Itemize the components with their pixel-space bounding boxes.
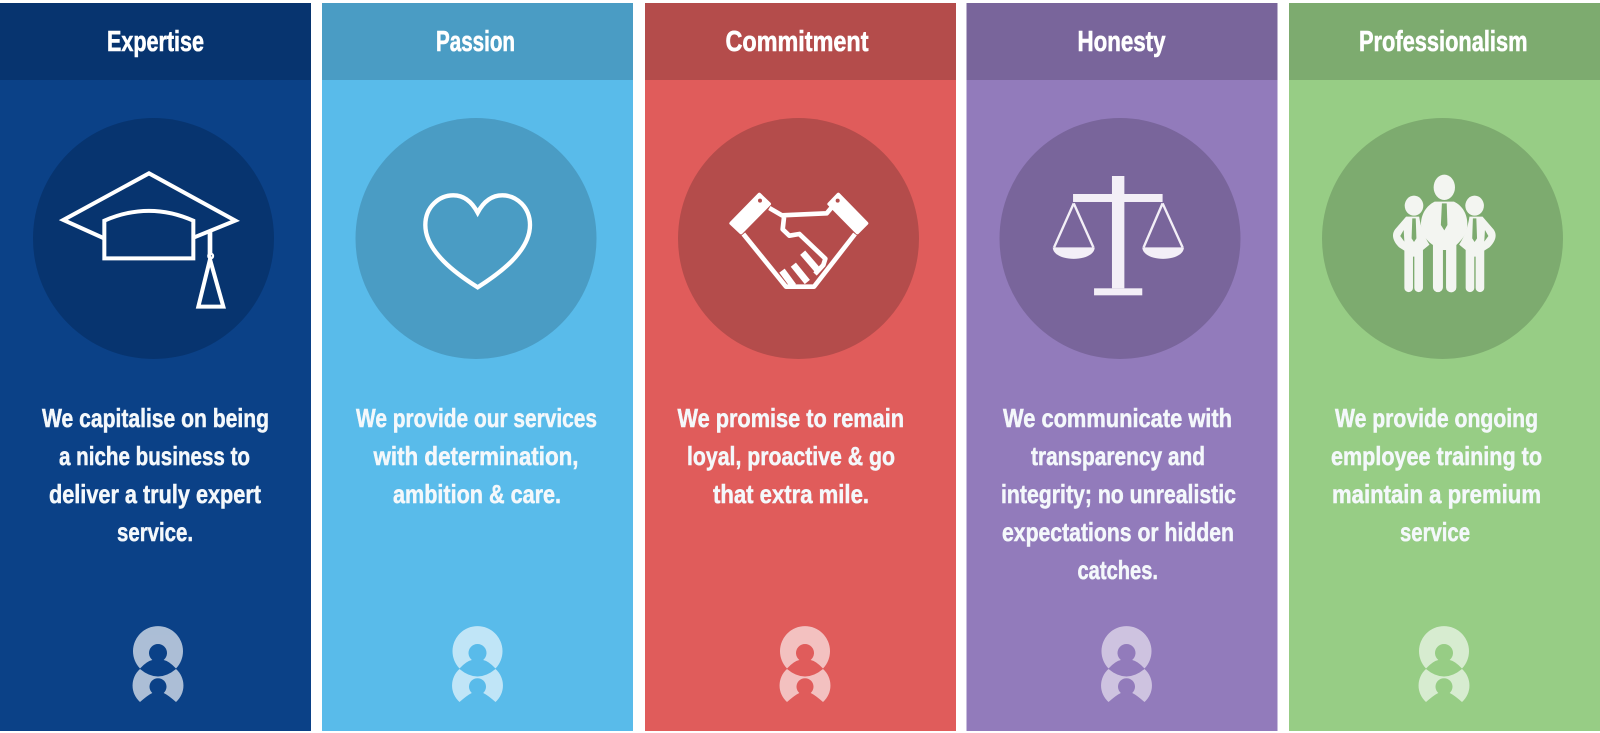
description text: catches. bbox=[1078, 555, 1158, 585]
icon: business people bbox=[1322, 118, 1563, 359]
logo bbox=[133, 626, 183, 702]
description text: service bbox=[1400, 517, 1470, 547]
logo bbox=[1101, 626, 1152, 702]
description text: service. bbox=[117, 517, 193, 547]
heading: Honesty bbox=[966, 3, 1278, 80]
heading: Expertise bbox=[0, 3, 311, 80]
heading: Passion bbox=[322, 3, 633, 80]
description text: deliver a truly expert bbox=[49, 479, 261, 509]
description text: expectations or hidden bbox=[1002, 517, 1234, 547]
panel: Passion bbox=[322, 3, 633, 731]
description text: We provide our services bbox=[356, 403, 597, 433]
heading: Professionalism bbox=[1289, 3, 1600, 80]
heading: Expertise: Expertise bbox=[107, 26, 204, 58]
heading: Passion: Passion bbox=[436, 26, 515, 58]
description text: maintain a premium bbox=[1332, 479, 1541, 509]
description text: a niche business to bbox=[59, 441, 250, 471]
logo bbox=[780, 626, 830, 702]
heading: Commitment bbox=[645, 3, 956, 80]
heading: Professionalism: Professionalism bbox=[1359, 26, 1528, 58]
icon: handshake bbox=[678, 118, 919, 359]
panel: Expertise bbox=[0, 3, 311, 731]
description text: We capitalise on being bbox=[42, 403, 269, 433]
icon: graduation cap bbox=[33, 118, 274, 359]
description text: employee training to bbox=[1331, 441, 1542, 471]
logo bbox=[1419, 626, 1469, 702]
description text: loyal, proactive & go bbox=[687, 441, 895, 471]
description text bbox=[678, 403, 904, 509]
logo bbox=[452, 626, 503, 702]
panel: Commitment bbox=[645, 3, 956, 731]
description text: ambition & care. bbox=[393, 479, 561, 509]
description text: transparency and bbox=[1031, 441, 1205, 471]
panel: Professionalism bbox=[1289, 3, 1600, 731]
description text bbox=[1331, 403, 1542, 547]
heading: Honesty: Honesty bbox=[1078, 26, 1166, 58]
description text bbox=[42, 403, 269, 547]
description text: We promise to remain bbox=[678, 403, 904, 433]
heading: Commitment: Commitment bbox=[726, 26, 869, 58]
description text: that extra mile. bbox=[713, 479, 869, 509]
description text: integrity; no unrealistic bbox=[1001, 479, 1236, 509]
description text bbox=[356, 403, 597, 509]
description text bbox=[1001, 403, 1236, 585]
panel: Honesty bbox=[966, 3, 1278, 731]
description text: with determination, bbox=[373, 441, 578, 471]
description text: We communicate with bbox=[1003, 403, 1232, 433]
description text: We provide ongoing bbox=[1335, 403, 1538, 433]
icon: heart bbox=[356, 118, 596, 359]
icon: scales bbox=[1000, 118, 1240, 359]
